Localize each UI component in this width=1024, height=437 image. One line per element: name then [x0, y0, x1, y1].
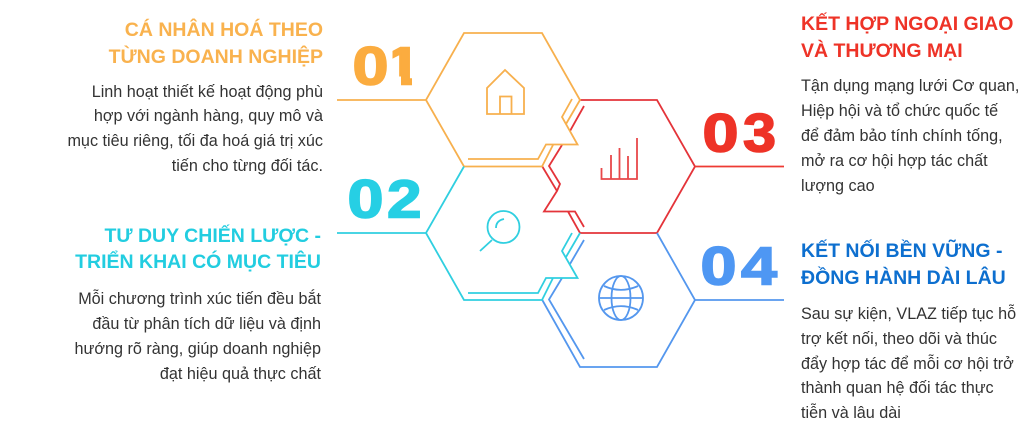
- body 03: lượng cao: [801, 177, 875, 195]
- heading 03: VÀ THƯƠNG MẠI: [801, 40, 963, 62]
- body 04: thành quan hệ đối tác thực: [801, 379, 994, 397]
- body 04: trợ kết nối, theo dõi và thúc: [801, 330, 997, 348]
- number 04: 0: [700, 236, 737, 296]
- body 01: [67, 83, 323, 175]
- heading 02: TRIỂN KHAI CÓ MỤC TIÊU: [75, 251, 321, 273]
- body 03: mở ra cơ hội hợp tác chất: [801, 152, 988, 170]
- number 02: 2: [387, 169, 422, 230]
- heading 04: ĐỒNG HÀNH DÀI LÂU: [801, 267, 1006, 289]
- body 04: Sau sự kiện, VLAZ tiếp tục hỗ: [801, 305, 1016, 323]
- body 03: để đảm bảo tính chính tống,: [801, 127, 1003, 145]
- number 02: 0: [348, 169, 384, 229]
- hexagon 04 blue outline: [542, 233, 784, 367]
- body 01: Linh hoạt thiết kế hoạt động phù: [92, 83, 323, 101]
- body 04: [801, 304, 1016, 422]
- body 01: tiến cho từng đối tác.: [172, 157, 323, 175]
- body 03: Hiệp hội và tổ chức quốc tế: [801, 102, 998, 120]
- number 01: [352, 36, 426, 96]
- heading 02: [75, 224, 321, 273]
- heading 02: TƯ DUY CHIẾN LƯỢC -: [104, 225, 321, 247]
- body 03: Tận dụng mạng lưới Cơ quan,: [801, 77, 1019, 95]
- heading 03: [801, 12, 1013, 62]
- panel: 02 text: [75, 224, 321, 383]
- hexagon 01 orange outline: [337, 33, 580, 166]
- body 04: đẩy hợp tác để mỗi cơ hội trở: [801, 355, 1014, 373]
- body 03: [801, 77, 1019, 195]
- icon: magnifier: [480, 211, 520, 251]
- number 03: 3: [743, 104, 776, 164]
- number 02: [348, 169, 422, 230]
- heading 01: TỪNG DOANH NGHIỆP: [109, 46, 323, 68]
- number 03: 0: [702, 103, 739, 163]
- heading 03: KẾT HỢP NGOẠI GIAO: [801, 13, 1013, 35]
- panel: 01 text: [67, 18, 323, 175]
- panel: 04 text: [801, 240, 1016, 422]
- hexagon 03 red outline: [542, 100, 784, 233]
- number 04: [700, 236, 777, 296]
- icon: globe: [599, 276, 643, 320]
- icon: house: [487, 70, 524, 114]
- body 01: mục tiêu riêng, tối đa hoá giá trị xúc: [67, 132, 323, 150]
- hexagon 02 cyan outline: [337, 166, 580, 300]
- number 01: 1: [385, 36, 421, 96]
- body 04: tiễn và lâu dài: [801, 404, 901, 422]
- number 03: [702, 103, 776, 164]
- heading 01: [108, 18, 323, 68]
- number 04: 4: [741, 236, 777, 296]
- heading 04: KẾT NỐI BỀN VỮNG -: [801, 240, 1002, 262]
- body 02: Mỗi chương trình xúc tiến đều bắt: [78, 290, 321, 308]
- body 02: [75, 289, 321, 383]
- body 02: đầu từ phân tích dữ liệu và định: [92, 315, 321, 333]
- heading 04: [801, 240, 1006, 289]
- body 02: hướng rõ ràng, giúp doanh nghiệp: [75, 340, 321, 358]
- heading 01: CÁ NHÂN HOÁ THEO: [125, 19, 323, 41]
- body 02: đạt hiệu quả thực chất: [160, 365, 321, 383]
- body 01: hợp với ngành hàng, quy mô và: [94, 107, 323, 125]
- icon: bar chart: [602, 138, 637, 179]
- number 01: 0: [352, 36, 389, 96]
- panel: 03 text: [801, 12, 1019, 195]
